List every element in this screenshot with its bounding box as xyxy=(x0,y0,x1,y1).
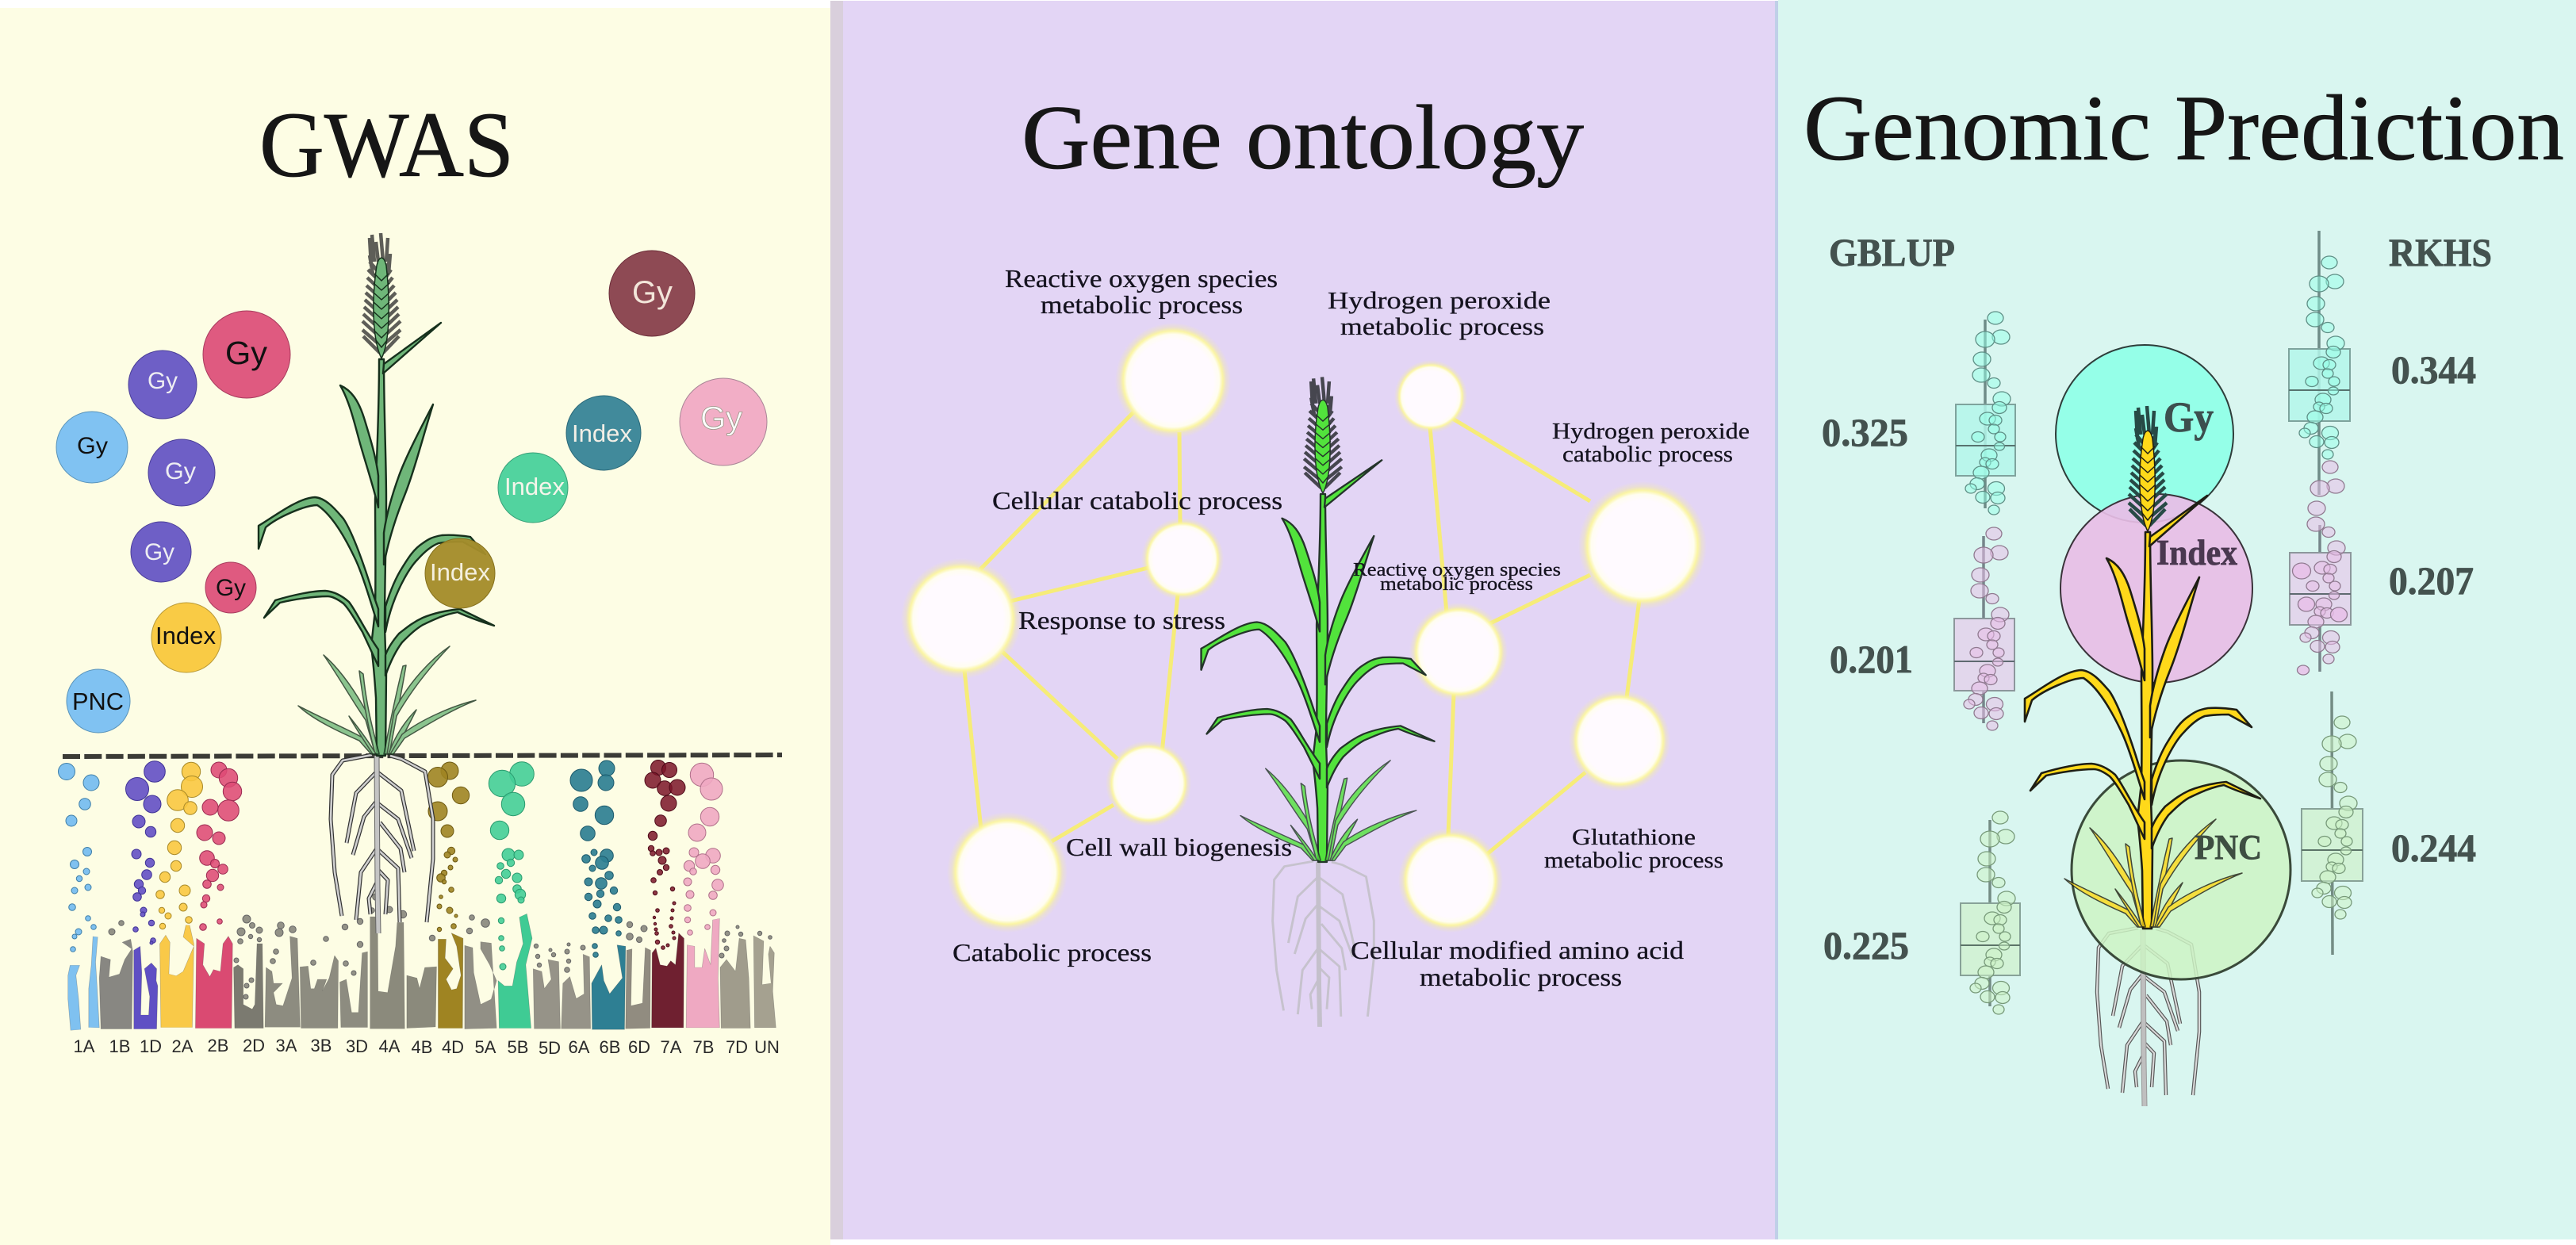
axis labels: chromosomes: 5B xyxy=(508,1037,528,1057)
bubble: Index brown xyxy=(425,538,495,608)
trait bubbles xyxy=(56,251,767,733)
boxplot: GBLUP Gy xyxy=(1956,312,2015,515)
bubble: Gy large pink: Gy xyxy=(225,335,267,371)
bubble: Gy purple xyxy=(128,351,197,419)
manhattan points: 2A xyxy=(156,762,203,929)
plant shoot green xyxy=(1202,377,1435,862)
value: GBLUP Gy 0.325: 0.325 xyxy=(1822,410,1908,454)
axis labels: chromosomes: 7B xyxy=(693,1037,714,1057)
manhattan points: 5B xyxy=(489,762,534,970)
manhattan points: 2B xyxy=(197,762,242,930)
label: cellular catabolic process: Cellular catabolic process xyxy=(992,486,1282,515)
title: GWAS: GWAS xyxy=(259,93,514,197)
value: RKHS PNC 0.244: 0.244 xyxy=(2391,826,2476,870)
label: reactive oxygen species metabolic process, top: metabolic process xyxy=(1041,290,1243,319)
axis labels: chromosomes: 1D xyxy=(140,1036,162,1056)
label: glutathione metabolic process: Glutathione xyxy=(1572,825,1696,850)
bubble: Gy light pink xyxy=(680,378,767,465)
label: hydrogen peroxide metabolic process: metabolic process xyxy=(1340,312,1544,340)
axis labels: chromosomes: 5A xyxy=(475,1037,496,1057)
label: cellular modified amino acid metabolic process xyxy=(1351,936,1684,991)
bubble: Gy maroon: Gy xyxy=(632,275,673,310)
bubble: Gy light pink: Gy xyxy=(700,400,742,436)
label: hydrogen peroxide metabolic process: Hydrogen peroxide xyxy=(1328,286,1551,314)
label: glutathione metabolic process: metabolic process xyxy=(1544,848,1723,873)
bubble: Gy small pink: Gy xyxy=(216,575,246,601)
label: hydrogen peroxide catabolic process: catabolic process xyxy=(1562,442,1733,467)
bubble: Index yellow xyxy=(151,603,221,672)
boxplot: RKHS Gy xyxy=(2289,231,2350,495)
bubble: Gy purple third xyxy=(131,522,191,582)
label: reactive oxygen species metabolic process, centre: Reactive oxygen species xyxy=(1353,560,1561,580)
value: GBLUP PNC 0.225: 0.225 xyxy=(1823,923,1909,967)
axis labels: chromosomes: 2D xyxy=(243,1036,265,1055)
bubble: Gy purple third: Gy xyxy=(144,539,174,565)
value: RKHS Gy 0.344: 0.344 xyxy=(2391,347,2476,392)
title: Gene ontology: Gene ontology xyxy=(1022,87,1584,189)
bubble: Index yellow: Index xyxy=(155,622,216,649)
label: hydrogen peroxide catabolic process: Hydrogen peroxide xyxy=(1552,419,1750,444)
axis labels: chromosomes: UN xyxy=(754,1037,780,1057)
label: reactive oxygen species metabolic process, top: Reactive oxygen species xyxy=(1005,264,1278,293)
panel: Genomic Prediction xyxy=(1778,0,2576,1239)
axis labels: chromosomes: 7A xyxy=(661,1037,682,1057)
plant roots xyxy=(331,755,433,933)
title: Genomic Prediction: Genomic Prediction xyxy=(1804,76,2564,180)
label: reactive oxygen species metabolic process, top xyxy=(1005,264,1278,319)
boxplot: RKHS PNC xyxy=(2302,691,2363,955)
bubble: Gy purple second: Gy xyxy=(165,458,196,485)
axis labels: chromosomes: 2B xyxy=(208,1036,228,1055)
axis labels: chromosomes: 6B xyxy=(600,1037,620,1057)
value: RKHS Index 0.207: 0.207 xyxy=(2389,558,2474,603)
label: cellular modified amino acid metabolic process: Cellular modified amino acid xyxy=(1351,936,1684,964)
bubble: PNC blue xyxy=(67,669,130,733)
label: glutathione metabolic process xyxy=(1544,825,1723,873)
plant roots faded xyxy=(1273,861,1374,1027)
bubble: Gy purple second xyxy=(148,439,215,506)
axis labels: chromosomes xyxy=(74,1036,780,1058)
plant shoot yellow xyxy=(2025,406,2260,929)
label: hydrogen peroxide metabolic process xyxy=(1328,286,1551,340)
axis labels: chromosomes: 3A xyxy=(276,1036,297,1055)
axis labels: chromosomes: 1A xyxy=(74,1036,95,1056)
manhattan points: 1A xyxy=(59,763,99,952)
ontology labels xyxy=(953,264,1750,991)
label: cell wall biogenesis: Cell wall biogenesis xyxy=(1066,833,1292,861)
plant shoot xyxy=(259,233,494,756)
manhattan points: gray chromosomes xyxy=(109,894,772,999)
axis labels: chromosomes: 4D xyxy=(442,1037,464,1057)
trait circle: Index xyxy=(2060,494,2252,683)
label: response to stress: Response to stress xyxy=(1018,606,1225,634)
trait label: Index: Index xyxy=(2156,533,2237,573)
manhattan points: 1D xyxy=(125,761,165,944)
axis labels: chromosomes: 7D xyxy=(726,1037,748,1057)
axis labels: chromosomes: 4A xyxy=(379,1036,401,1056)
bubble: PNC blue: PNC xyxy=(72,688,124,715)
bubble: Gy blue: Gy xyxy=(77,433,108,459)
manhattan points: 4D xyxy=(428,762,470,932)
axis labels: chromosomes: 6D xyxy=(628,1037,650,1057)
bubble: Index teal: Index xyxy=(572,419,632,447)
boxplot: GBLUP PNC xyxy=(1961,811,2020,1014)
manhattan points: 7B xyxy=(684,763,723,935)
axis labels: chromosomes: 6A xyxy=(569,1037,590,1057)
bubble: Index green xyxy=(498,453,568,523)
label: reactive oxygen species metabolic process, centre: metabolic process xyxy=(1380,574,1533,595)
heading: RKHS: RKHS xyxy=(2389,230,2492,274)
plant roots xyxy=(2097,928,2199,1106)
bubble: Index brown: Index xyxy=(430,558,490,586)
heading: GBLUP: GBLUP xyxy=(1829,230,1955,274)
axis labels: chromosomes: 4B xyxy=(412,1037,432,1057)
axis labels: chromosomes: 3D xyxy=(346,1036,368,1056)
axis labels: chromosomes: 2A xyxy=(172,1036,194,1056)
boxplot: RKHS Index xyxy=(2290,461,2351,675)
manhattan points: 7A xyxy=(645,760,685,949)
manhattan points: 6B xyxy=(570,760,622,957)
bubble: Index teal xyxy=(566,396,641,470)
label: reactive oxygen species metabolic process, centre xyxy=(1353,560,1561,595)
bubble: Gy large pink xyxy=(203,311,290,398)
label: hydrogen peroxide catabolic process xyxy=(1552,419,1750,467)
trait label: Gy: Gy xyxy=(2164,393,2214,441)
panel: Gene ontology xyxy=(843,1,1778,1239)
bubble: Gy purple: Gy xyxy=(148,368,178,394)
axis labels: chromosomes: 5D xyxy=(539,1038,561,1058)
label: catabolic process: Catabolic process xyxy=(953,938,1152,967)
boxplot: GBLUP Index xyxy=(1954,527,2014,730)
trait circle: PNC xyxy=(2072,760,2290,979)
axis labels: chromosomes: 3B xyxy=(311,1036,332,1055)
label: cellular modified amino acid metabolic process: metabolic process xyxy=(1420,963,1622,991)
value: GBLUP Index 0.201: 0.201 xyxy=(1830,637,1913,681)
trait circle: Gy xyxy=(2056,345,2233,523)
axis labels: chromosomes: 1B xyxy=(109,1036,130,1056)
panel: GWAS xyxy=(0,1,843,1245)
bubble: Gy maroon xyxy=(609,251,695,336)
bubble: Index green: Index xyxy=(504,473,565,500)
bubble: Gy small pink xyxy=(205,562,256,613)
bubble: Gy blue xyxy=(56,412,128,483)
network edges xyxy=(964,412,1639,854)
trait label: PNC: PNC xyxy=(2195,828,2262,867)
ground dashed line xyxy=(63,755,782,757)
manhattan plot chromosome columns xyxy=(68,914,776,1030)
network nodes xyxy=(901,323,1707,933)
